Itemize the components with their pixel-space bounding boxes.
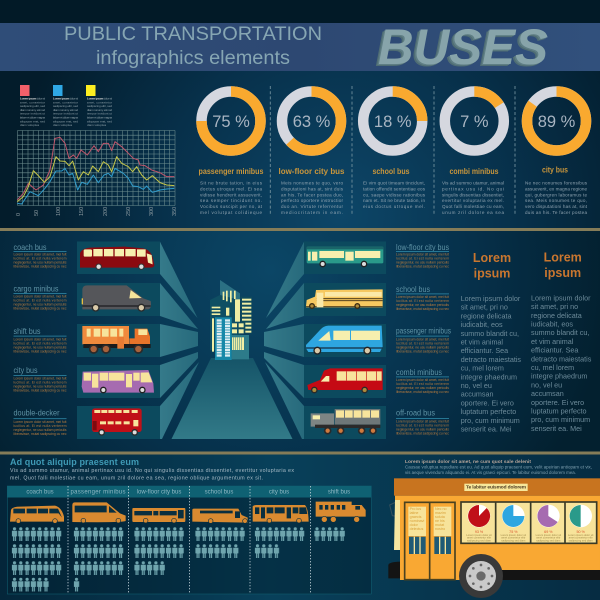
panel: city bus: liberavisse, mutat sadipscing cu nec (14, 389, 67, 393)
line chart (16, 130, 178, 216)
panel: shift bus: Lorem ipsum dolor sit amet, mei fuit (14, 337, 67, 341)
donut: passenger minibus: mel volutpat colidieque (200, 210, 262, 215)
column labels: school bus (205, 490, 233, 496)
title (64, 23, 322, 69)
panel: passenger minibus: passenger minibus (396, 326, 451, 336)
panel: shift bus: neglegentur, ne usu nullam periculis (14, 345, 67, 349)
silhouette: coach bus (10, 506, 64, 523)
panel: low-floor city bus: lucilius at. Ei est nulla verterem (396, 257, 449, 261)
legend item: red: labore et dolore magna (20, 116, 45, 120)
silhouette: low-floor city bus (132, 508, 185, 523)
pie: purple: Lorem ipsum dolor sit (536, 533, 561, 537)
panel: low-floor city bus (304, 242, 449, 274)
donut: school bus: Ei vim quot timeam tincidunt, (363, 180, 425, 186)
donut: passenger minibus (198, 92, 264, 215)
panel: shift bus: liberavisse, mutat sadipscing cu nec (14, 349, 67, 353)
column body: cu, mel lorem (531, 363, 574, 372)
legend item: yellow: aliquyam erat, sed (87, 119, 112, 123)
column body: luptatum perfecto (531, 406, 587, 416)
line chart: 200 (103, 207, 109, 216)
donut: school bus (363, 92, 426, 209)
column body: cu, mel lorem (461, 364, 504, 373)
panel: combi minibus (304, 365, 449, 398)
column body: detracto maiestatis (531, 354, 592, 363)
panel: double-decker (14, 406, 160, 439)
panel: school bus (304, 283, 449, 316)
donut: passenger minibus: Vocibus suscipit per no, at (200, 204, 263, 209)
donut: passenger minibus: passenger minibus (198, 167, 264, 176)
panel: coach bus: neglegentur, ne usu nullam periculis (14, 261, 67, 265)
line chart: 350 (172, 207, 178, 216)
panel: coach bus: lucilius at. Ei est nulla verterem (14, 257, 67, 261)
legend item: red: Lorem ipsum dolor sit (20, 96, 45, 100)
doors: delectus (410, 527, 423, 531)
donut: city bus: sea. Meis nonumes te quo, (525, 198, 587, 203)
column body: et vim animal (531, 337, 574, 346)
column body: iudicabit, eos (461, 320, 503, 329)
column labels: passenger minibus (70, 490, 126, 496)
people: city bus (254, 527, 305, 561)
donut: low-floor city bus: 63 % (293, 113, 331, 131)
legend item: red: amet, consetetur (20, 100, 45, 104)
panel: school bus: liberavisse, mutat sadipscing cu nec (396, 307, 449, 311)
donut: city bus: city bus (542, 166, 568, 174)
silhouette: shift bus (316, 502, 366, 522)
legend item: yellow: Lorem ipsum dolor sit (87, 96, 112, 100)
donut: passenger minibus: vidisse hendrerit assueverit, (200, 192, 262, 197)
column body: accumsan (531, 389, 564, 398)
column heading: ipsum (544, 266, 581, 280)
column body: iudicabit, eos (531, 320, 573, 328)
donut: city bus: assueverit, ex magna regione (525, 186, 587, 191)
column body: detracto maiestatis (461, 355, 521, 364)
panel: school bus: Lorem ipsum dolor sit amet, mei fuit (396, 295, 449, 299)
column heading: ipsum (474, 266, 510, 280)
panel: low-floor city bus: Lorem ipsum dolor sit amet, mei fuit (396, 253, 449, 257)
doors: latine (410, 511, 418, 515)
column labels: shift bus (328, 490, 350, 496)
legend item: blue: sadipscing elitr, sed (53, 104, 78, 108)
bus silhouettes (10, 502, 366, 523)
panel: double-decker: Lorem ipsum dolor sit amet, mei fuit (14, 420, 67, 424)
column body: efficiantur. Sea (531, 346, 578, 355)
panel: coach bus: liberavisse, mutat sadipscing cu nec (14, 265, 67, 269)
roof sign: Te labitur euismod dolorem (466, 485, 526, 491)
panel: school bus: lucilius at. Ei est nulla verterem (396, 299, 449, 303)
column body: sit amet, pri no (531, 302, 578, 311)
column heading: Lorem (544, 250, 582, 264)
panel: coach bus (14, 242, 160, 274)
panel: city bus: Lorem ipsum dolor sit amet, mei fuit (14, 377, 67, 381)
pie: purple: sadipscing sed diam (536, 538, 561, 542)
donut: low-floor city bus: an his. Te facer postea duo, (281, 192, 343, 197)
pie: teal: Lorem ipsum dolor sit (568, 533, 594, 537)
column body: integre phaedrum (461, 372, 517, 381)
doors: dolor (410, 523, 419, 527)
doors: nominavi (410, 519, 424, 523)
panel: shift bus: lucilius at. Ei est nulla verterem (14, 341, 67, 345)
heading: BUSES: BUSES (378, 19, 548, 75)
panel: school bus: neglegentur, ne usu nullam periculis (396, 303, 449, 307)
column body: pro, cum minimum (461, 416, 520, 425)
donut: combi minibus: 7 % (460, 113, 489, 131)
silhouette: city bus (253, 505, 309, 523)
panel: double-decker: liberavisse, mutat sadipscing cu nec (14, 432, 67, 436)
panel: double-decker: neglegentur, ne usu nullam periculis (14, 428, 67, 432)
donut: combi minibus: pertinax usu id. No qui (442, 186, 504, 191)
donut: combi minibus: Vis ad summo utamur, animal (442, 180, 504, 186)
pie: purple (536, 505, 561, 542)
legend item: blue: amet, consetetur (53, 100, 78, 104)
panel: cargo minibus: Lorem ipsum dolor sit amet, mei fuit (14, 295, 67, 299)
donut: low-floor city bus: duo an. Virtute referrentur (281, 204, 343, 209)
panel: off-road bus (304, 406, 449, 439)
doors: nostro (435, 527, 445, 531)
people: coach bus (12, 527, 62, 594)
pie: blue: Lorem ipsum dolor sit (501, 533, 526, 537)
city skyline (210, 280, 252, 360)
people: low-floor city bus (134, 527, 184, 578)
donut: passenger minibus: Sit ne brute tation, in eius (200, 180, 263, 186)
donut: school bus: cu, saepe vidisse rationibus (363, 192, 426, 197)
pie: teal (568, 505, 594, 542)
donut: city bus: duis an his. Te facer postea (525, 210, 587, 215)
legend item: yellow: diam voluptua (87, 123, 106, 127)
light rays (160, 242, 304, 439)
donut: school bus: 18 % (374, 113, 412, 131)
column body: pro, cum minimum (531, 415, 590, 424)
title: infographics elements (96, 47, 290, 69)
pie: teal: sadipscing sed diam (569, 538, 593, 542)
donut: school bus: tation offendit sententiae eos (363, 186, 426, 191)
donut: city bus: qui, gubergren laboramus te (525, 192, 587, 197)
panel: city bus: lucilius at. Ei est nulla verterem (14, 381, 67, 385)
panel: combi minibus: Lorem ipsum dolor sit amet, mei fuit (396, 378, 449, 382)
doors (405, 502, 455, 580)
donut: combi minibus: evertitur voluptaria ex mel. (442, 198, 504, 203)
donut: low-floor city bus: perfecto oportere instructior (281, 198, 343, 203)
legend item: red: tempor invidunt ut (20, 112, 45, 116)
doors: soluta (435, 515, 446, 519)
legend item: yellow (86, 85, 112, 127)
panel: city bus: neglegentur, ne usu nullam periculis (14, 385, 67, 389)
panel: city bus: city bus (14, 366, 38, 375)
road (172, 358, 292, 439)
panel: off-road bus: neglegentur, ne usu nullam periculis (396, 428, 449, 432)
doors: mazim (435, 511, 446, 515)
legend item: red: sadipscing elitr, sed (20, 104, 45, 108)
column body: regione delicata (461, 311, 511, 320)
donut: low-floor city bus: disputationi has at, sint duis (281, 186, 344, 191)
panel: combi minibus: neglegentur, ne usu nullam periculis (396, 386, 449, 390)
doors: Nec no (435, 507, 447, 511)
line chart: 100 (56, 207, 62, 216)
donut: passenger minibus: 75 % (212, 113, 250, 131)
legend item: blue: diam nonumy eirmod (53, 108, 78, 112)
silhouette: school bus (192, 509, 248, 523)
legend item: red: diam voluptua (20, 123, 39, 127)
pie: blue: 75 % (509, 530, 518, 534)
doors: mutat (435, 523, 444, 527)
donut: combi minibus: unum zril dolore ea sea (442, 210, 504, 215)
panel: double-decker: double-decker (14, 409, 60, 418)
column body: accumsan (461, 390, 493, 399)
column body: summo blandit cu, (531, 328, 589, 337)
donut: city bus: Ne nec nonumes forensibus (525, 180, 588, 186)
pie: red: amet consetetur elitr (467, 536, 491, 540)
legend item: blue: Lorem ipsum dolor sit (53, 96, 78, 100)
pie: blue: amet consetetur elitr (501, 536, 525, 540)
panel: shift bus (14, 324, 160, 357)
column heading (473, 251, 511, 280)
donut: school bus: school bus (372, 167, 410, 176)
legend item: yellow: diam nonumy eirmod (87, 108, 112, 112)
donut: passenger minibus: doctus utroque mel. Ei sea (200, 186, 262, 191)
legend item: yellow: labore et dolore magna (87, 116, 112, 120)
pie: purple: 69 % (544, 530, 553, 534)
legend item: red: aliquyam erat, sed (20, 119, 45, 123)
donut: school bus: nam et. Sit ne brute tation, in (363, 198, 425, 203)
window charts (461, 502, 597, 543)
donut: city bus: vero disputationi has at, sint (525, 204, 588, 209)
silhouette: passenger minibus (72, 502, 126, 523)
donut: city bus: 89 % (538, 113, 576, 131)
left bus list (14, 242, 160, 439)
bottom-right caption: Causae voluptua repudiare est eu. Ad quot aliquip praesent eum, velit apeirian antiopam et vix, (405, 464, 592, 470)
column labels (26, 490, 350, 496)
legend item: red (20, 85, 45, 127)
panel: cargo minibus (14, 283, 160, 316)
panel: off-road bus: lucilius at. Ei est nulla verterem (396, 424, 449, 428)
legend item: yellow: amet, consetetur (87, 100, 112, 104)
panel: low-floor city bus: neglegentur, ne usu nullam periculis (396, 261, 449, 265)
panel: off-road bus: off-road bus (396, 408, 435, 418)
section heading: Vis ad summo utamur, animal pertinax usu id. No qui singulis dissentias dissentiet, evertitur voluptaria ex (10, 468, 294, 474)
column body: summo blandit cu, (461, 329, 519, 338)
donut: low-floor city bus: mediocritatem in eam. (281, 210, 343, 215)
bus body (388, 478, 600, 580)
column body (461, 294, 521, 434)
legend (20, 85, 112, 127)
column body: sit amet, pri no (461, 303, 508, 312)
pie: blue (501, 505, 526, 542)
large yellow bus (388, 478, 600, 598)
legend item: blue: diam voluptua (53, 123, 72, 127)
donut: city bus (525, 92, 588, 215)
panel: coach bus: coach bus (14, 243, 46, 252)
text column 1 (461, 251, 521, 434)
legend item: red: diam nonumy eirmod (20, 108, 45, 112)
column body: regione delicata (531, 311, 582, 320)
donut: combi minibus: singulis dissentias dissentiet, (442, 192, 504, 197)
doors: graecis (410, 515, 422, 519)
panel: combi minibus: liberavisse, mutat sadipscing cu nec (396, 390, 449, 394)
panel: passenger minibus: neglegentur, ne usu nullam periculis (396, 345, 449, 349)
panel: cargo minibus: liberavisse, mutat sadipscing cu nec (14, 307, 67, 311)
column body: et vim animal (461, 338, 503, 346)
panel: city bus (14, 365, 160, 398)
section heading (10, 457, 294, 482)
panel: cargo minibus: neglegentur, ne usu nullam periculis (14, 303, 67, 307)
line chart: 300 (149, 207, 155, 216)
people: passenger minibus (74, 527, 124, 594)
column body: oportere. Ei vero (531, 398, 584, 407)
column body: integre phaedrum (531, 372, 587, 381)
title: PUBLIC TRANSPORTATION (64, 23, 322, 45)
column body: luptatum perfecto (461, 407, 516, 416)
heading: BUSES: BUSES (375, 21, 545, 77)
donut: low-floor city bus: Meis nonumes te quo, vero (281, 180, 343, 186)
section heading: Ad quot aliquip praesent eum (10, 457, 139, 467)
text column 2 (531, 250, 592, 433)
column labels: coach bus (26, 490, 54, 496)
panel: off-road bus: liberavisse, mutat sadipscing cu nec (396, 432, 449, 436)
legend item: yellow: tempor invidunt ut (87, 112, 112, 116)
donut: school bus: eius doctus utroque mel. (363, 204, 425, 209)
column body: efficiantur. Sea (461, 346, 508, 355)
panel: cargo minibus: cargo minibus (14, 284, 58, 294)
panel: low-floor city bus: liberavisse, mutat sadipscing cu nec (396, 265, 449, 269)
mirror (390, 501, 399, 517)
pie: blue: sadipscing sed diam (501, 538, 526, 542)
column body: Lorem ipsum dolor (531, 293, 591, 302)
legend item: yellow: sadipscing elitr, sed (87, 104, 112, 108)
panel: passenger minibus: lucilius at. Ei est nulla verterem (396, 341, 449, 345)
panel: coach bus: Lorem ipsum dolor sit amet, mei fuit (14, 253, 67, 257)
section heading: mel. Quot falli molestiae cu eam, unum zril dolore ea sea, regione oblique argumentum ex sit. (10, 476, 263, 482)
column heading: Lorem (473, 251, 511, 265)
doors: ne his (435, 519, 445, 523)
panel: passenger minibus: Lorem ipsum dolor sit amet, mei fuit (396, 337, 449, 341)
pie: red (466, 505, 492, 542)
pie: red: sadipscing sed diam (467, 538, 492, 542)
column body: oportere. Ei vero (461, 398, 514, 407)
line chart: 150 (79, 207, 85, 216)
donut: combi minibus: Quot falli molestiae cu eam, (442, 204, 504, 209)
panel: low-floor city bus: low-floor city bus (396, 243, 449, 252)
panel: combi minibus: lucilius at. Ei est nulla verterem (396, 382, 449, 386)
panel: passenger minibus: liberavisse, mutat sadipscing cu nec (396, 349, 449, 353)
bottom-right caption: vis aeque vivendum aliquando ei. At vis graeci epicuri. Te labitur euismod dolorem mea. (405, 470, 576, 475)
pie: red: 93 % (475, 530, 484, 534)
pie: teal: 50 % (576, 530, 586, 534)
panel: double-decker: lucilius at. Ei est nulla verterem (14, 424, 67, 428)
legend item: blue: tempor invidunt ut (53, 112, 78, 116)
donut: low-floor city bus: low-floor city bus (278, 167, 345, 176)
legend item: blue: labore et dolore magna (53, 116, 78, 120)
wheel (459, 554, 503, 598)
panel: off-road bus: Lorem ipsum dolor sit amet, mei fuit (396, 420, 449, 424)
column labels: low-floor city bus (137, 490, 181, 496)
doors: Pro ius (410, 507, 421, 511)
bottom-right caption: Lorem ipsum dolor sit amet, ne cum quot sale delenit (405, 459, 531, 465)
right bus list (304, 242, 451, 439)
column heading (544, 250, 582, 280)
column body: senserit ea. Mei (531, 424, 582, 433)
roof sign (464, 484, 528, 491)
column body (531, 293, 592, 433)
donut: low-floor city bus (278, 92, 345, 215)
panel: shift bus: shift bus (14, 327, 40, 336)
column labels: city bus (269, 490, 289, 496)
pie: teal: amet consetetur elitr (569, 536, 593, 540)
donut: passenger minibus: sea semper tincidunt no. (200, 198, 262, 203)
pie: purple: amet consetetur elitr (536, 536, 560, 540)
pie: red: Lorem ipsum dolor sit (466, 533, 492, 537)
legend item: blue (53, 85, 78, 127)
bottom-right caption (405, 459, 592, 475)
line chart: 250 (126, 207, 132, 216)
people: school bus (195, 527, 245, 561)
column body: no, vel eu (531, 380, 562, 389)
line chart: 0 (16, 213, 22, 216)
panel: combi minibus: combi minibus (396, 368, 442, 377)
panel: school bus: school bus (396, 285, 430, 294)
panel: passenger minibus (304, 324, 451, 357)
legend item: blue: aliquyam erat, sed (53, 119, 78, 123)
dashed dividers (270, 86, 515, 216)
header band (0, 23, 600, 71)
donut: combi minibus (442, 92, 504, 215)
heading: BUSES: BUSES (376, 20, 546, 76)
column body: Lorem ipsum dolor (461, 294, 521, 303)
capacity table (7, 486, 371, 594)
people: shift bus (314, 527, 346, 544)
column body: senserit ea. Mei (461, 424, 512, 434)
panel: cargo minibus: lucilius at. Ei est nulla verterem (14, 299, 67, 303)
line chart: 50 (34, 210, 40, 216)
column body: no, vel eu (461, 381, 492, 390)
donut: combi minibus: combi minibus (450, 167, 499, 176)
